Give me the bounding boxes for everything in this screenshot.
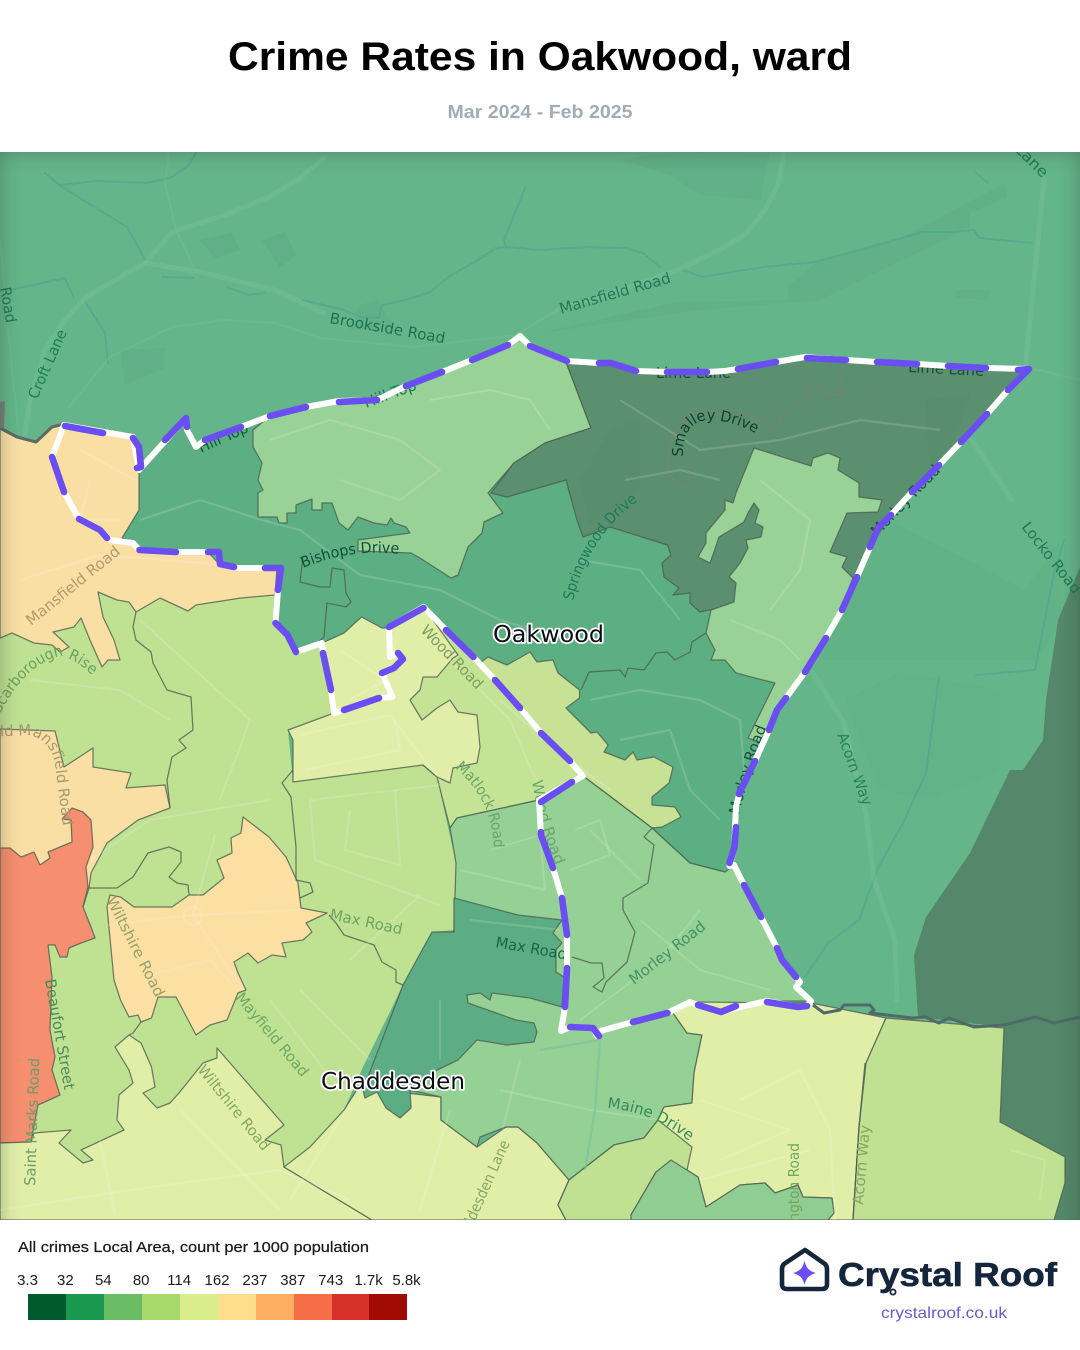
grey marker block at left edge <box>0 401 5 428</box>
lime area, Matlock Road <box>410 624 578 828</box>
legend scale values: 32 <box>57 1272 74 1289</box>
label: Chaddesden Lane: Chaddesden Lane <box>448 1137 514 1254</box>
inner ward boundary lines <box>140 390 940 872</box>
lime strip along the ward diagonal <box>480 652 681 828</box>
salmon area, lower left <box>0 1178 17 1220</box>
label: Beaufort Street: Beaufort Street <box>41 978 78 1091</box>
label: Mansfield Road north: Mansfield Road <box>557 269 673 318</box>
label: Lime Lane east: Lime Lane <box>908 358 985 380</box>
label: Wood Road south: Wood Road <box>532 780 566 864</box>
light green area, south ward and Maine Drive <box>410 776 811 1180</box>
local street network <box>0 450 1045 1220</box>
ward boundary: white line <box>52 336 1029 1036</box>
place label: Chaddesden: Chaddesden <box>321 1069 465 1095</box>
peach area, Mansfield Road <box>0 424 277 667</box>
label: Saint Marks Road: Saint Marks Road <box>21 1058 43 1186</box>
label: Hill Top west: Hill Top <box>195 419 251 457</box>
place label: Oakwood: Oakwood <box>493 622 604 648</box>
label: Hill Top east: Hill Top <box>361 376 419 412</box>
legend scale values: 1.7k <box>354 1272 383 1289</box>
map base: north green area <box>0 152 1080 1220</box>
jagged county boundary <box>813 1005 1080 1027</box>
lime area, far south east <box>853 1018 1065 1220</box>
website link: crystalroof.co.uk <box>881 1305 1008 1322</box>
peach area, Wiltshire Road <box>107 817 327 1035</box>
legend colour bar <box>28 1294 407 1320</box>
lime area, south <box>558 1120 692 1220</box>
label: Matlock Road: Matlock Road <box>456 760 506 847</box>
label: Smalley Drive: Smalley Drive <box>672 410 758 456</box>
ward boundary: purple dashes <box>52 345 1029 1036</box>
far-right dark green region <box>914 567 1080 1220</box>
label: Lane at north edge: Lane <box>1011 140 1052 181</box>
label: Croft Lane: Croft Lane <box>24 327 71 402</box>
label: Lime Lane west: Lime Lane <box>656 364 731 382</box>
lime residential area, west <box>0 590 456 1167</box>
inner darker patches of the dark section <box>666 370 843 488</box>
map edge vignette <box>0 152 1080 1220</box>
pale yellow-green area, south west <box>0 1035 372 1220</box>
pale south east estate <box>558 1002 886 1220</box>
legend scale values: 5.8k <box>392 1272 421 1289</box>
salmon high-crime area <box>0 808 95 1143</box>
date range subtitle: Mar 2024 - Feb 2025 <box>448 101 632 122</box>
label: Mansfield Road on peach: Mansfield Road <box>22 542 124 629</box>
label: Maine Drive: Maine Drive <box>608 1097 692 1140</box>
medium green patch, Max Road <box>363 898 564 1118</box>
label: Springwood Drive: Springwood Drive <box>563 496 637 600</box>
label: Brookside Road: Brookside Road <box>328 309 447 347</box>
label: Mayfield Road: Mayfield Road <box>232 989 313 1080</box>
label: Wood Road north: Wood Road <box>417 621 487 693</box>
label: Max Road west: Max Road <box>328 905 404 938</box>
light green patch, bottom centre <box>631 1160 834 1220</box>
legend scale values: 743 <box>318 1272 343 1289</box>
pale yellow-green area, Wood Road <box>288 607 480 783</box>
legend scale values: 387 <box>280 1272 305 1289</box>
light green ward section, east Oakwood <box>698 448 882 742</box>
jagged boundary, top left <box>0 424 64 442</box>
legend scale values: 54 <box>95 1272 112 1289</box>
ward base: medium green neighbourhoods <box>124 424 774 871</box>
dark green ward section, Springwood and Smalley <box>491 357 1029 612</box>
legend scale values: 3.3 <box>17 1272 38 1289</box>
label: Acorn Way south: Acorn Way <box>849 1124 874 1205</box>
legend scale values: 162 <box>204 1272 230 1289</box>
pale yellow-green area, Chaddesden centre <box>284 1088 569 1220</box>
legend title: All crimes Local Area, count per 1000 population <box>18 1239 369 1256</box>
legend scale values: 80 <box>133 1272 150 1289</box>
legend scale values: 114 <box>167 1272 191 1289</box>
logo wordmark: Crystal Roof <box>838 1256 1058 1293</box>
title: Crime Rates in Oakwood, ward <box>228 35 852 79</box>
legend scale values <box>17 1272 421 1289</box>
label: Wiltshire Road on peach: Wiltshire Road <box>102 894 168 1000</box>
icon: Crystal Roof house logo <box>782 1250 827 1289</box>
light green ward section, Hill Top <box>253 336 591 578</box>
legend scale values: 237 <box>242 1272 267 1289</box>
peach area, old Mansfield Road <box>0 729 170 888</box>
label: Morley Road: Morley Road <box>625 917 709 988</box>
label: Wiltshire Road south: Wiltshire Road <box>194 1061 274 1154</box>
label: Bishops Drive: Bishops Drive <box>300 541 398 568</box>
label: Morley Road along east boundary: Morley Road <box>870 464 940 536</box>
label: Morley Road along middle boundary: Morley Road <box>728 724 766 814</box>
fields and streams north of the ward <box>0 152 1080 1000</box>
label: Kensington Road: Kensington Road <box>785 1143 803 1258</box>
label: Acorn Way north: Acorn Way <box>833 730 876 808</box>
label: Max Road east: Max Road <box>494 933 568 963</box>
